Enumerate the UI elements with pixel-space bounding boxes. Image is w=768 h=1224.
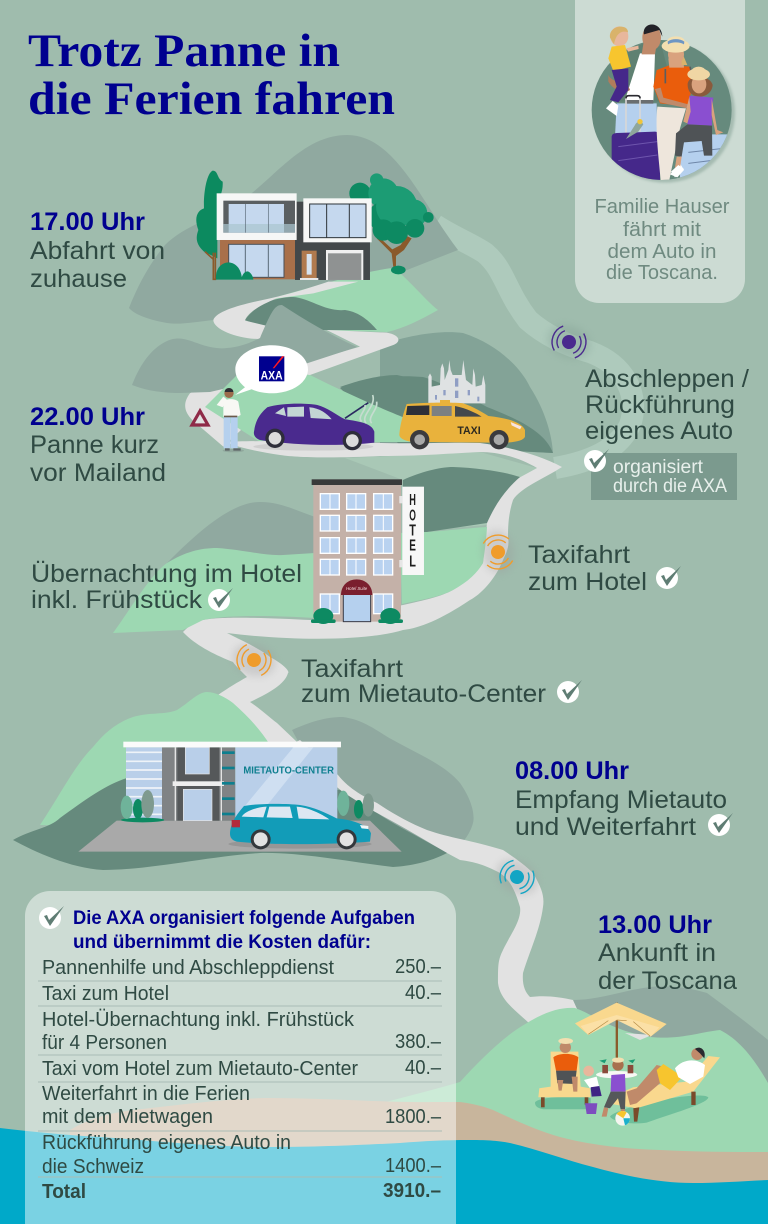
text: 13.00 arrival: 13.00 Uhr (598, 911, 712, 939)
hotel sign: H (409, 492, 416, 509)
row: taxi to hotel: Taxi zum Hotel (42, 983, 169, 1005)
row: hotel: 380.– (395, 1031, 442, 1053)
road: segment from house (185, 282, 398, 447)
text: 08.00 rental pick-up: 08.00 Uhr (515, 757, 629, 785)
text: 08.00 rental pick-up: und Weiterfahrt (515, 813, 696, 841)
icon: taxi (399, 400, 525, 449)
row: car return (42, 1132, 442, 1178)
text: taxi to rental center: zum Mietauto-Center (301, 680, 546, 708)
hotel door (343, 593, 371, 622)
text: hotel overnight: Übernachtung im Hotel (31, 560, 302, 588)
hotel sign (399, 487, 424, 575)
row: total (42, 1180, 441, 1203)
purple suitcase (612, 132, 660, 182)
hotel sign: L (409, 554, 416, 571)
text: 13.00 arrival: Ankunft in (598, 939, 716, 967)
row: taxi to rental center: Taxi vom Hotel zum Mietauto-Center (42, 1058, 358, 1080)
center sign: MIETAUTO-CENTER (243, 765, 334, 776)
icon: hotel building: Hotel Suite (346, 586, 368, 591)
mother (653, 36, 693, 180)
row: total: 3910.– (383, 1180, 441, 1202)
signal: orange at taxi to rental center (229, 639, 279, 681)
landscape: green hill at hotel left (113, 548, 315, 633)
woman sitting (553, 1038, 578, 1092)
signal: orange at taxi to hotel (478, 528, 518, 576)
text: taxi to rental center (301, 655, 546, 708)
row: car return: 1400.– (385, 1155, 442, 1177)
man lounger (608, 1056, 720, 1108)
right tree (349, 173, 434, 267)
landscape: mid mountain right (380, 332, 553, 453)
landscape: gray mountain right of rental center (292, 717, 474, 853)
text: towing: Rückführung (585, 391, 735, 419)
landscape: road stub behind umbrella (625, 1033, 652, 1040)
landscape: green hill at beach (240, 1008, 768, 1200)
icon: check table (39, 906, 64, 929)
icon: purple broken-down car (253, 395, 377, 451)
AXA logo: AXA (261, 370, 283, 383)
row: car return: die Schweiz (42, 1156, 144, 1178)
signal: teal (490, 853, 544, 901)
landscape: green hill at hotel right (400, 527, 487, 604)
bushes (216, 262, 406, 280)
icon: rental car center (78, 742, 402, 852)
icon: check rental taxi (557, 680, 582, 703)
umbrella (575, 1003, 667, 1058)
text: 17.00 departure (30, 208, 165, 293)
road: main winding road (183, 441, 562, 742)
hotel sign: E (409, 538, 416, 555)
row: hotel (42, 1009, 442, 1054)
hotel bushes (311, 608, 403, 624)
landscape: dark base at rental center (13, 778, 447, 870)
icon: check hotel (208, 588, 233, 611)
row: taxi to hotel (42, 982, 442, 1005)
text: taxi to rental center: Taxifahrt (301, 655, 403, 683)
row: rental car: Weiterfahrt in die Ferien (42, 1083, 250, 1105)
speech bubble with AXA logo (235, 345, 308, 395)
road: below rental center to beach (290, 740, 606, 1024)
row: breakdown and towing: Pannenhilfe und Abschleppdienst (42, 957, 334, 979)
text: family caption: fährt mit (623, 219, 701, 241)
text: 13.00 arrival (598, 911, 737, 995)
house walls (295, 202, 370, 280)
signal: purple (543, 319, 595, 365)
icon: family portrait (592, 24, 735, 185)
text: 22.00 breakdown: 22.00 Uhr (30, 403, 145, 431)
text: 13.00 arrival: der Toscana (598, 967, 737, 995)
hotel sign: T (409, 522, 416, 539)
text: 22.00 breakdown: vor Mailand (30, 459, 166, 487)
icon: beach family (535, 1003, 720, 1126)
row: total: Total (42, 1181, 86, 1203)
icon: warning triangle (192, 411, 208, 425)
row: hotel: Hotel-Übernachtung inkl. Frühstück (42, 1009, 355, 1031)
table with drinks (596, 1059, 637, 1078)
taxi sign: TAXI (457, 425, 481, 437)
text: family caption: die Toscana. (606, 262, 718, 284)
child (583, 1066, 602, 1097)
landscape: dark hump behind taxi (340, 376, 553, 453)
text: family caption: dem Auto in (608, 241, 716, 263)
callout: organised by AXA (591, 453, 737, 500)
row: car return: Rückführung eigenes Auto in (42, 1132, 291, 1154)
text: family caption (594, 196, 730, 284)
teal car (228, 804, 372, 849)
icon: Milan cathedral (428, 360, 485, 403)
girl (602, 1057, 626, 1117)
text: 22.00 breakdown (30, 403, 166, 487)
row: rental car: 1800.– (385, 1106, 442, 1128)
girl (671, 67, 723, 177)
text: 17.00 departure: zuhause (30, 265, 127, 293)
man relaxing (627, 1048, 705, 1105)
row: rental car: mit dem Mietwagen (42, 1106, 213, 1128)
toddler (606, 26, 639, 116)
panel: cost table (25, 891, 456, 1224)
icon: hotel building (311, 479, 424, 624)
landscape: green hill at rental center (40, 692, 270, 830)
landscape: green hill top (245, 268, 438, 332)
row: hotel: für 4 Personen (42, 1032, 167, 1054)
bucket (585, 1103, 597, 1114)
text: 22.00 breakdown: Panne kurz (30, 431, 159, 459)
callout: organised by AXA: durch die AXA (613, 476, 727, 497)
title: Trotz Panne in (28, 25, 340, 77)
row: breakdown and towing: 250.– (395, 956, 442, 978)
icon: check taxi to hotel (656, 566, 681, 589)
landscape: light path band (435, 225, 633, 468)
text: 17.00 departure: Abfahrt von (30, 237, 165, 265)
text: taxi to hotel (528, 541, 647, 596)
chair shadows (535, 1095, 708, 1123)
pavement (78, 821, 402, 852)
landscape: top mountain (129, 135, 458, 324)
blue suitcase (680, 134, 728, 178)
row: rental car (42, 1083, 442, 1128)
text: towing: Abschleppen / (585, 365, 749, 393)
left lounger (538, 1052, 591, 1097)
landscape: gray mountain left of hotel (167, 502, 315, 580)
hotel sign: O (409, 507, 416, 524)
title: die Ferien fahren (28, 73, 395, 125)
landscape: left gray mountain (132, 305, 357, 393)
parrot (626, 122, 643, 139)
suitcase handle (626, 96, 640, 133)
left tree (196, 171, 223, 279)
landscape: sea (0, 1128, 768, 1224)
father (615, 24, 668, 137)
text: hotel overnight (31, 560, 302, 614)
callout: organised by AXA: organisiert (613, 457, 704, 478)
landscape: dark hump right of hotel (403, 467, 520, 532)
small trees (121, 790, 374, 822)
text: taxi to hotel: zum Hotel (528, 568, 647, 596)
row: taxi to hotel: 40.– (405, 982, 442, 1004)
title (28, 25, 395, 125)
hotel windows (320, 494, 393, 614)
beach ball (615, 1111, 630, 1126)
row: taxi to rental center: 40.– (405, 1057, 442, 1079)
text: 08.00 rental pick-up: Empfang Mietauto (515, 786, 727, 814)
text: towing (585, 365, 749, 445)
panel: family intro (575, 0, 745, 303)
text: towing: eigenes Auto (585, 417, 733, 445)
table heading: Die AXA organisiert folgende Aufgaben (73, 908, 415, 929)
icon: house (196, 171, 434, 280)
icon: man on phone (217, 388, 244, 452)
landscape: dark patch by cathedral (340, 375, 425, 405)
table heading: und übernimmt die Kosten dafür: (73, 932, 371, 953)
landscape: light ground below taxi road (345, 452, 537, 532)
table heading (73, 908, 415, 953)
text: taxi to hotel: Taxifahrt (528, 541, 630, 569)
landscape: dark hump top (245, 297, 377, 330)
icon: check rental car (708, 813, 733, 836)
icon: check towing (584, 449, 609, 472)
landscape: green hill by car (205, 370, 413, 442)
text: family caption: Familie Hauser (594, 196, 730, 218)
landscape: sand (70, 1098, 768, 1200)
text: hotel overnight: inkl. Frühstück (31, 586, 203, 614)
landscape: gray mountain at beach (573, 986, 768, 1100)
text: 08.00 rental pick-up (515, 757, 727, 841)
text: 17.00 departure: 17.00 Uhr (30, 208, 145, 236)
